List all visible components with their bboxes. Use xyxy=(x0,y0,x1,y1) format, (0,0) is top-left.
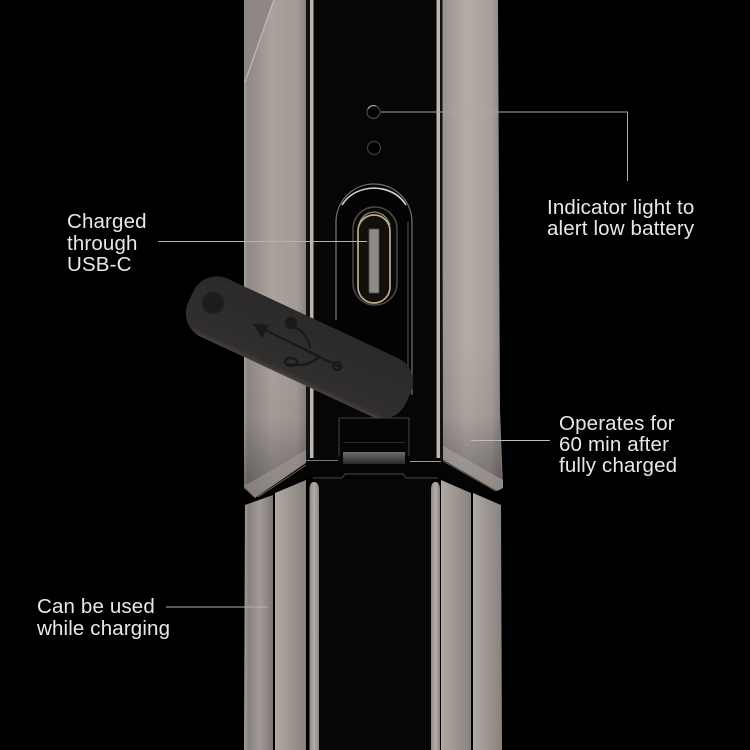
text: indicator light: Indicator light to xyxy=(547,196,694,219)
leader line: use while charging xyxy=(166,606,268,608)
right chrome strip xyxy=(436,0,440,458)
text: use while charging: while charging xyxy=(36,617,170,640)
device joint xyxy=(255,460,497,498)
hinge xyxy=(338,417,410,474)
lower inner left panel xyxy=(275,480,306,750)
rubber port cap xyxy=(177,268,422,427)
callout: use while charging xyxy=(36,595,268,640)
text: runtime: 60 min after xyxy=(559,433,669,456)
device: upper body xyxy=(244,0,503,498)
USB symbol xyxy=(255,318,341,370)
black centre face xyxy=(314,0,436,462)
lower outer left panel xyxy=(244,495,273,750)
left chrome strip xyxy=(306,0,310,460)
indicator lights xyxy=(367,106,380,154)
upper left metal panel xyxy=(244,0,306,498)
text: use while charging: Can be used xyxy=(37,595,155,618)
text: runtime: fully charged xyxy=(559,454,677,477)
text: indicator light: alert low battery xyxy=(547,217,695,240)
leader line: USB-C xyxy=(158,240,367,242)
lower outer right panel xyxy=(473,493,502,750)
leader line: runtime xyxy=(471,440,550,442)
lower inner right panel xyxy=(441,480,471,750)
text: runtime: Operates for xyxy=(559,412,675,435)
callout: USB-C xyxy=(67,210,367,276)
lower black face xyxy=(319,479,431,750)
upper right metal panel xyxy=(442,0,503,491)
text: USB-C: through xyxy=(67,232,138,255)
lower right strip xyxy=(431,482,440,750)
text: USB-C: USB-C xyxy=(67,253,132,276)
cap peg xyxy=(202,292,224,314)
lower left strip xyxy=(310,482,319,750)
USB-C port xyxy=(336,184,412,395)
callout: runtime xyxy=(471,412,677,477)
text: USB-C: Charged xyxy=(67,210,147,233)
callout: indicator light xyxy=(381,112,695,240)
leader line: indicator light xyxy=(381,112,628,181)
device: lower body xyxy=(244,479,502,750)
